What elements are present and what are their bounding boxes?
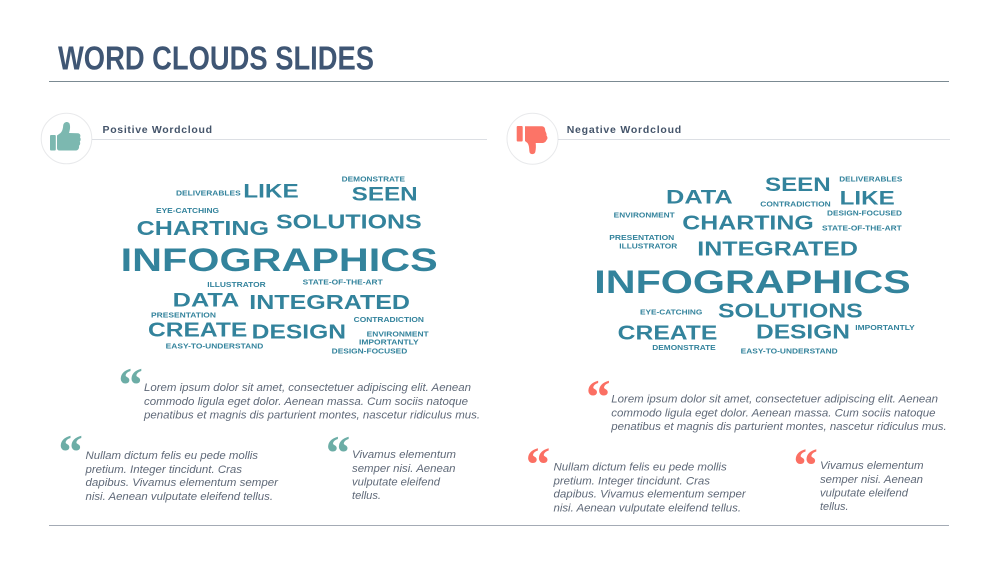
word cloud: positive: DEMONSTRATE <box>342 175 405 184</box>
quote: positive left: Nullam dictum felis eu pede mollis <box>86 450 258 462</box>
quote: negative right: tellus. <box>820 501 848 513</box>
word cloud: positive: DESIGN-FOCUSED <box>332 346 408 355</box>
word cloud: negative <box>594 174 915 356</box>
word cloud: negative: IMPORTANTLY <box>855 323 915 332</box>
quote: positive right <box>326 425 456 502</box>
word cloud: negative: DESIGN <box>756 321 850 343</box>
word cloud: positive: DATA <box>173 291 240 312</box>
quote: negative left <box>526 436 747 514</box>
word cloud: negative: STATE-OF-THE-ART <box>822 223 902 232</box>
quote: positive left <box>58 424 279 503</box>
word cloud: positive: ILLUSTRATOR <box>207 280 266 289</box>
word cloud: positive: SEEN <box>352 185 418 206</box>
quote: negative main: Lorem ipsum dolor sit amet, consectetuer adipiscing elit. Aenean <box>611 394 938 406</box>
quote: positive right: tellus. <box>352 490 381 502</box>
quote: positive main <box>118 357 480 422</box>
word cloud: positive: INFOGRAPHICS <box>121 242 438 278</box>
word cloud: positive: LIKE <box>243 182 299 203</box>
quote: positive left: dapibus. Vivamus elementum semper <box>86 477 279 489</box>
icon: thumbs down <box>507 113 558 164</box>
quote: positive left: pretium. Integer tincidunt. Cras <box>84 464 242 476</box>
word cloud: negative: INTEGRATED <box>697 238 858 260</box>
quote: negative main: “ <box>586 369 610 424</box>
heading: positive wordcloud: Positive Wordcloud <box>102 124 212 136</box>
panel: positive wordcloud <box>41 113 487 503</box>
quote: negative left: nisi. Aenean vulputate eleifend tellus. <box>554 502 741 514</box>
word cloud: positive: EASY-TO-UNDERSTAND <box>166 342 264 351</box>
icon: thumbs up <box>41 113 92 164</box>
word cloud: negative: DESIGN-FOCUSED <box>827 209 903 218</box>
word cloud: negative: ILLUSTRATOR <box>619 241 678 250</box>
word cloud: positive: ENVIRONMENT <box>367 330 429 339</box>
word cloud: negative: EYE-CATCHING <box>640 308 702 317</box>
word cloud: negative: ENVIRONMENT <box>614 211 675 220</box>
word cloud: positive: CREATE <box>148 320 247 342</box>
quote: negative right: semper nisi. Aenean <box>820 474 923 486</box>
word cloud: negative: DATA <box>666 188 733 209</box>
quote: negative left: “ <box>526 436 550 492</box>
word cloud: negative: CREATE <box>618 322 717 344</box>
word cloud: negative: LIKE <box>840 189 895 210</box>
quote: positive right: vulputate eleifend <box>352 476 441 488</box>
word cloud: negative: SEEN <box>765 175 831 196</box>
quote: negative right: vulputate eleifend <box>820 488 909 500</box>
quote: positive left: nisi. Aenean vulputate eleifend tellus. <box>86 491 273 503</box>
quote: negative main: penatibus et magnis dis parturient montes, nascetur ridiculus mus. <box>610 421 947 433</box>
heading: negative wordcloud: Negative Wordcloud <box>567 124 681 136</box>
quote: positive main: penatibus et magnis dis parturient montes, nascetur ridiculus mus. <box>143 410 480 422</box>
word cloud: negative: SOLUTIONS <box>718 300 863 322</box>
quote: negative left: dapibus. Vivamus elementum semper <box>554 488 747 500</box>
word cloud: negative: DELIVERABLES <box>839 174 902 183</box>
word cloud: negative: CONTRADICTION <box>760 200 831 209</box>
title: WORD CLOUDS SLIDES <box>58 40 374 76</box>
quote: negative right <box>793 438 924 513</box>
quote: negative right: “ <box>793 438 818 492</box>
quote: negative main <box>586 369 947 433</box>
word cloud: negative: DEMONSTRATE <box>652 343 716 352</box>
quote: positive main: commodo ligula eget dolor. Aenean massa. Cum sociis natoque <box>144 396 468 408</box>
quote: negative right: Vivamus elementum <box>820 460 924 472</box>
word cloud: positive: IMPORTANTLY <box>359 337 419 346</box>
word cloud: positive: EYE-CATCHING <box>156 206 219 215</box>
quote: positive main: “ <box>118 357 143 412</box>
word cloud: positive <box>121 175 438 355</box>
word cloud: positive: PRESENTATION <box>151 310 216 319</box>
word cloud: positive: STATE-OF-THE-ART <box>303 277 383 286</box>
word cloud: positive: CHARTING <box>137 218 269 240</box>
quote: negative main: commodo ligula eget dolor. Aenean massa. Cum sociis natoque <box>611 408 936 420</box>
quote: positive right: semper nisi. Aenean <box>352 463 456 475</box>
quote: positive main: Lorem ipsum dolor sit amet, consectetuer adipiscing elit. Aenean <box>144 382 471 394</box>
word cloud: negative: INFOGRAPHICS <box>594 264 911 300</box>
word cloud: positive: DELIVERABLES <box>176 189 241 198</box>
word cloud: positive: SOLUTIONS <box>276 211 422 233</box>
word cloud: positive: INTEGRATED <box>249 292 410 314</box>
word cloud: positive: CONTRADICTION <box>354 315 424 324</box>
quote: positive left: “ <box>58 424 83 479</box>
quote: positive right: “ <box>326 425 350 480</box>
word cloud: negative: PRESENTATION <box>609 233 674 242</box>
panel: negative wordcloud <box>507 113 950 514</box>
word cloud: negative: EASY-TO-UNDERSTAND <box>741 347 838 356</box>
word cloud: negative: CHARTING <box>682 212 814 234</box>
quote: positive right: Vivamus elementum <box>352 449 456 461</box>
quote: negative left: Nullam dictum felis eu pede mollis <box>554 462 727 474</box>
quote: negative left: pretium. Integer tincidunt. Cras <box>552 476 710 488</box>
word cloud: positive: DESIGN <box>252 321 346 343</box>
